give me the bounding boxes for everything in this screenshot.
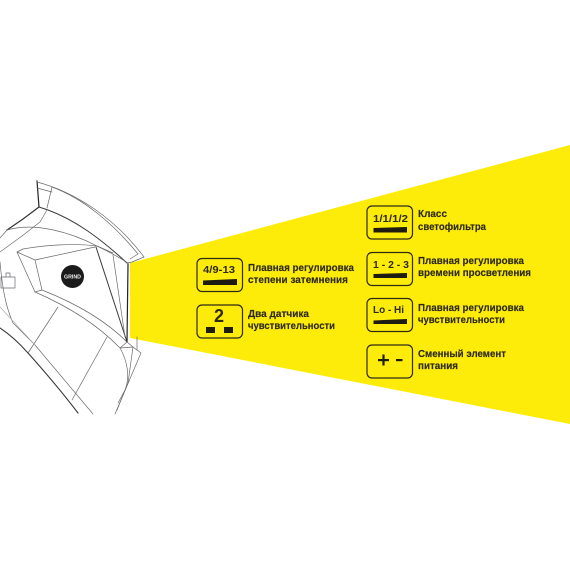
feature: replaceable battery: Сменный элемент xyxy=(418,348,506,360)
feature: replaceable battery: питания xyxy=(418,360,458,372)
feature: shade range: 4/9-13 xyxy=(203,265,235,276)
logo badge: GRIND xyxy=(64,274,81,280)
helmet top ridge xyxy=(0,181,144,263)
feature: shade range: Плавная регулировка xyxy=(248,262,354,274)
feature: filter class: светофильтра xyxy=(418,221,486,233)
logo badge xyxy=(61,265,84,288)
feature: two sensors: Два датчика xyxy=(248,308,309,320)
lower jaw xyxy=(0,262,141,414)
feature: filter class: Класс xyxy=(418,208,447,220)
yellow light beam xyxy=(130,145,570,424)
feature: sensitivity: Плавная регулировка xyxy=(418,302,524,314)
feature: shade range: степени затемнения xyxy=(248,274,348,286)
feature: shade range xyxy=(197,258,354,292)
feature: filter class: 1/1/1/2 xyxy=(373,214,408,225)
helmet line drawing xyxy=(0,181,144,414)
feature: two sensors: чувствительности xyxy=(248,320,335,332)
feature: filter class xyxy=(367,206,486,239)
feature: sensitivity xyxy=(367,298,524,332)
visor opening xyxy=(17,245,128,348)
feature: replaceable battery xyxy=(367,345,506,378)
feature: switching time: 1 - 2 - 3 xyxy=(373,260,409,271)
feature: switching time: времени просветления xyxy=(418,267,531,279)
side clip xyxy=(1,273,15,288)
feature: sensitivity: Lo - Hi xyxy=(373,305,404,316)
feature: two sensors xyxy=(197,305,335,338)
feature: switching time: Плавная регулировка xyxy=(418,255,524,267)
feature: switching time xyxy=(367,252,531,286)
feature: two sensors: 2 xyxy=(214,306,224,326)
feature: sensitivity: чувствительности xyxy=(418,314,505,326)
